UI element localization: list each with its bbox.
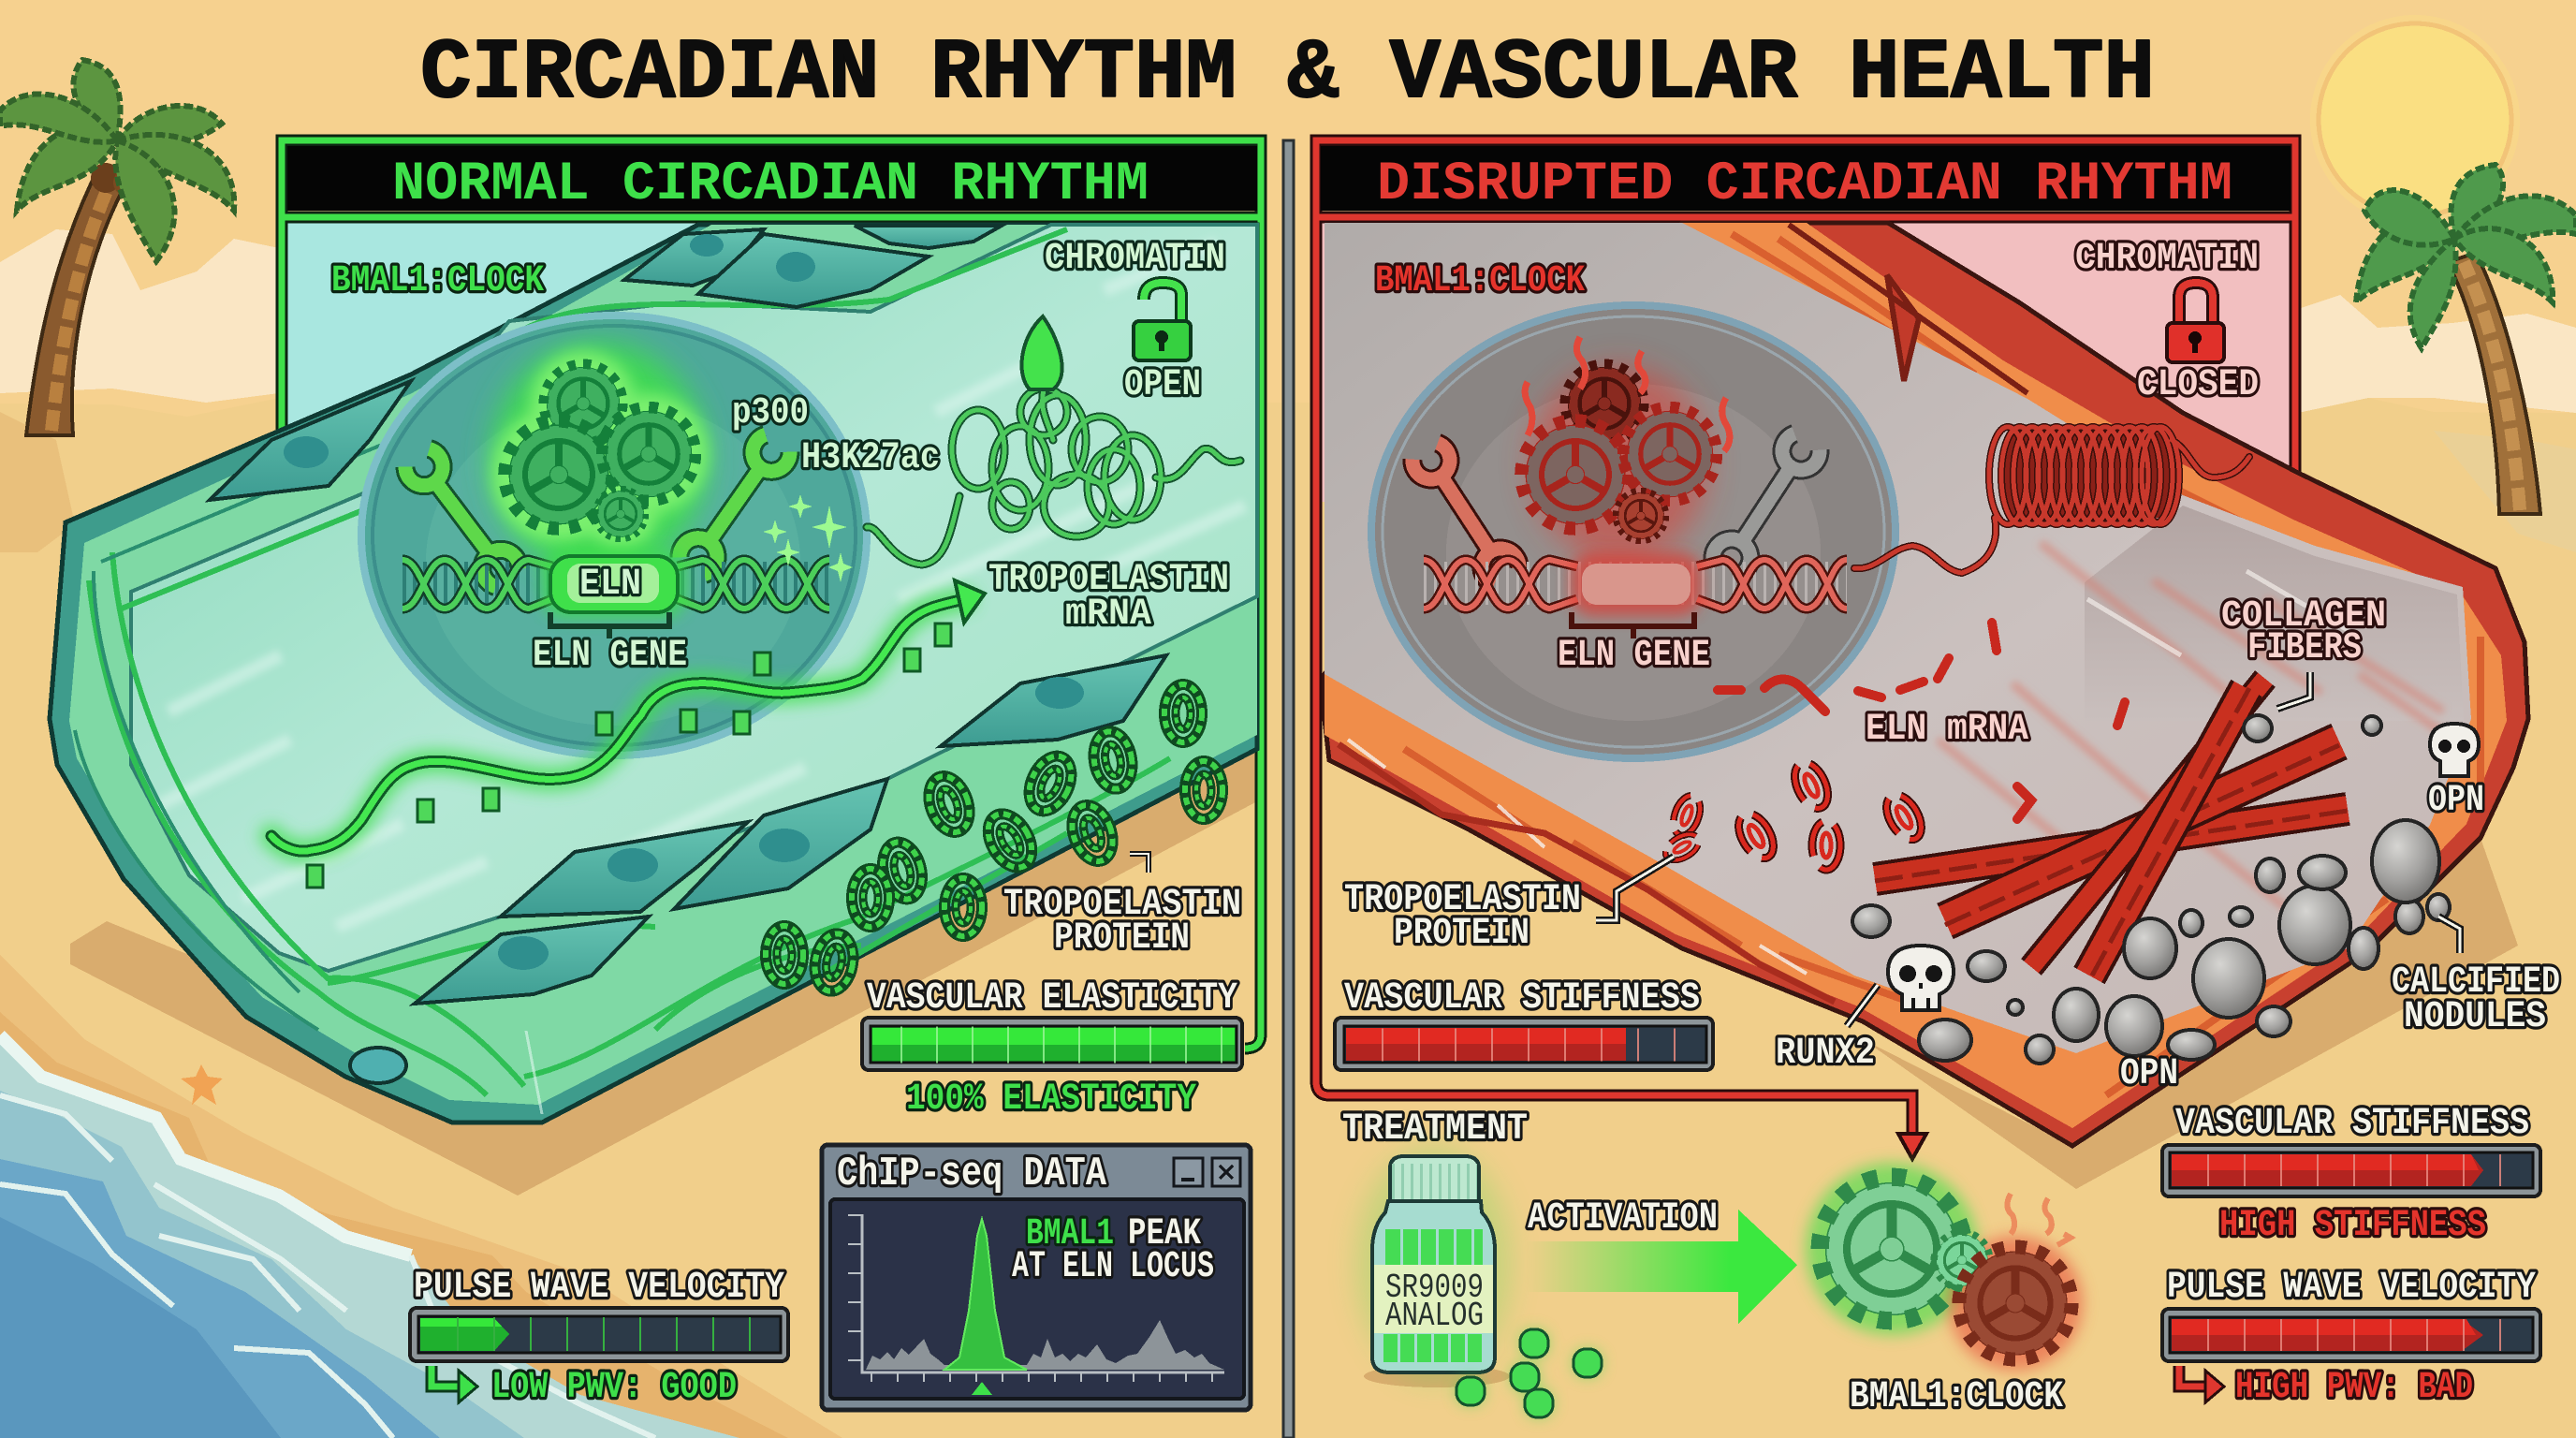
callout: RUNX2 [1776,985,1878,1075]
arrow and verdict: HIGH PWV: BAD [2235,1367,2473,1409]
label: ELN gene: ELN GENE [533,635,687,677]
center divider [1283,140,1294,1438]
pill bottle [1357,1147,1511,1387]
ChIP-seq window [822,1145,1251,1410]
label: CLOSED: CLOSED [2137,364,2259,406]
label: CHROMATIN disrupted: CHROMATIN [2075,238,2259,280]
verdict: HIGH STIFFNESS [2219,1205,2486,1247]
arrow and verdict: LOW PWV: GOOD [491,1367,737,1409]
gears: damaged clock complex [1521,364,1717,562]
sparkles [763,494,853,582]
label: PULSE WAVE VELOCITY [414,1267,784,1309]
bar [862,1018,1242,1070]
wrench left [402,447,522,589]
pill bottle: ANALOG [1385,1297,1484,1335]
calcified nodules [1852,715,2450,1064]
panel frame [1316,140,2295,1137]
label: tropoelastin mRNA: TROPOELASTIN [988,559,1229,601]
value: 100% ELASTICITY [906,1078,1196,1121]
clouds right [2298,295,2576,413]
clouds left [0,229,279,403]
icon: starfish [181,1064,223,1105]
label: CHROMATIN: CHROMATIN [1045,238,1225,280]
nucleus [1371,305,1895,758]
vessel drop shadow left [70,730,1257,1196]
artery layers [69,225,1257,1105]
callout: tropoelastin protein: PROTEIN [1054,917,1190,960]
ELN gene box [541,548,687,619]
palm tree right [2356,165,2576,514]
ELN gene bracket [1572,612,1694,638]
peak annotation: PEAK [1128,1213,1201,1255]
wrench gray [1710,432,1822,578]
icon: open lock [1134,283,1191,360]
media fibers [1404,234,2481,1095]
arrow: activation [1526,1210,1797,1324]
ELN gene box: ELN [579,564,641,606]
label: VASCULAR STIFFNESS [1344,977,1700,1020]
peak annotation: AT ELN LOCUS [1012,1246,1214,1288]
vessel drop shadow right [1863,838,2518,1189]
wrench right [677,433,793,577]
label: OPEN: OPEN [1124,364,1201,406]
header bar [287,146,1257,215]
vascular elasticity meter [862,977,1242,1121]
header bar: NORMAL CIRCADIAN RHYTHM [392,154,1149,215]
outer wall [1325,223,2528,1146]
label: BMAL1:CLOCK: BMAL1:CLOCK [331,260,544,302]
torn wall strands [1789,225,2027,393]
plot [830,1199,1244,1399]
DNA helix active [402,560,829,609]
p300 enzyme drop [1022,316,1062,389]
label: VASCULAR STIFFNESS [2175,1103,2529,1145]
label: VASCULAR ELASTICITY [867,977,1237,1020]
pulse wave velocity meter: low [410,1267,788,1409]
collagen fibers [1875,679,2348,976]
arrow and verdict [432,1366,737,1409]
panel background [285,221,1258,502]
callout: collagen fibers [2221,595,2386,709]
lumen streaks [159,243,1245,927]
callout: tropoelastin protein disrupted [1344,857,1674,955]
mRNA glowing strand [271,580,985,851]
label: treatment: TREATMENT [1342,1108,1528,1151]
degraded protein coils [1661,757,1928,870]
window buttons [1174,1158,1240,1186]
cell nuclei [284,234,1084,970]
empty ELN box [1571,552,1702,616]
label: activation: ACTIVATION [1528,1197,1718,1240]
peak annotation: BMAL1 [1026,1213,1114,1255]
bar [410,1308,788,1361]
loose pills [1456,1329,1602,1417]
label: ELN mRNA: ELN mRNA [1866,709,2028,751]
label: p300: p300 [732,392,809,434]
label: BMAL1:CLOCK treatment: BMAL1:CLOCK [1850,1376,2063,1418]
panel frame [282,140,1261,1049]
mRNA fragments [1718,623,2125,819]
header bar: DISRUPTED CIRCADIAN RHYTHM [1377,154,2232,215]
gears: reactivated clock [1806,1163,2083,1371]
callout: tropoelastin protein [1003,854,1241,960]
heat flames [1525,337,1730,451]
callout: OPN lower: OPN [2120,1053,2178,1095]
panel background [1320,221,2295,502]
ocean shoreline [0,1012,788,1438]
callout: tropoelastin protein: TROPOELASTIN [1003,884,1241,926]
callout: tropoelastin protein disrupted: PROTEIN [1394,913,1530,955]
arrow head into gears [1898,1134,1926,1159]
vein lines [89,229,1170,1095]
gears: BMAL1 CLOCK complex glowing [491,342,709,576]
label: ELN gene disrupted: ELN GENE [1558,635,1710,677]
chromatin strand open [867,389,1240,565]
artery outer wall [50,225,1257,1123]
callout: calcified nodules: NODULES [2404,996,2546,1038]
callout: OPN upper: OPN [2428,780,2484,822]
lumen streaks [1938,543,2452,936]
label: BMAL1:CLOCK disrupted: BMAL1:CLOCK [1375,260,1585,302]
bar [2162,1309,2540,1361]
sun [2310,15,2520,225]
lumen dark patch [2085,506,2464,721]
lumen [1325,223,2471,1053]
label: tropoelastin mRNA [988,559,1229,636]
nucleus [361,315,867,756]
treatment section [1342,1108,2083,1418]
wrench red [1410,441,1522,587]
stiff artery cross-section [1325,223,2528,1146]
vascular stiffness meter: panel [1335,977,1713,1070]
ELN gene bracket [550,612,669,638]
tropoelastin coils [766,684,1222,994]
chromatin closed coil [1854,427,2249,573]
callout: tropoelastin protein disrupted: TROPOELASTIN [1344,879,1581,921]
orange media layer [1325,223,2507,1128]
icon: skull large [1888,946,1954,1010]
artery cross-section [50,225,1257,1123]
endothelial cells [210,226,1166,1083]
panel: normal circadian rhythm [50,140,1261,1123]
label: H3K27ac: H3K27ac [801,437,940,479]
lumen [131,225,1257,971]
pulse wave velocity meter: high [2162,1267,2540,1409]
heat wisps [2007,1194,2071,1245]
DNA helix silenced [1424,560,1847,609]
arrow and verdict [2179,1366,2473,1409]
peak annotation [1012,1213,1214,1288]
label: tropoelastin mRNA: mRNA [1065,594,1151,636]
callout: collagen fibers: COLLAGEN [2221,595,2386,638]
mRNA document icons [307,624,951,888]
callout: collagen fibers: FIBERS [2247,627,2362,669]
icon: skull small [2430,724,2479,776]
callout: calcified nodules [2392,917,2560,1038]
icon: closed lock [2167,283,2224,362]
vascular stiffness meter: high [2162,1103,2540,1247]
bar [1335,1018,1713,1070]
window title: ChIP-seq DATA [837,1151,1106,1197]
palm tree left [0,60,234,435]
title: CIRCADIAN RHYTHM & VASCULAR HEALTH [420,26,2155,123]
callout: RUNX2: RUNX2 [1776,1033,1875,1075]
bar [2162,1145,2540,1196]
bottle label text: SR9009 [1385,1269,1484,1307]
